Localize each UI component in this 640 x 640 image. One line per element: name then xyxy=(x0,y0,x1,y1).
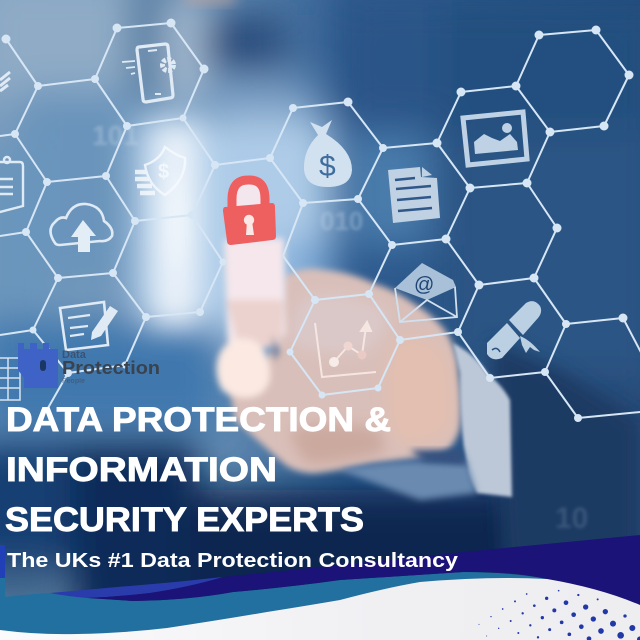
icon: smartphone with gear xyxy=(122,44,174,102)
logo: Data Protection People: Protection xyxy=(62,358,160,378)
halftone dots xyxy=(478,590,640,640)
title: INFORMATION xyxy=(6,451,277,489)
icon: money bag xyxy=(304,120,352,187)
sleeve xyxy=(490,340,640,580)
wave: teal swoosh xyxy=(0,572,640,640)
neck at top xyxy=(185,0,235,4)
icon: cloud upload xyxy=(50,204,112,252)
logo: Data Protection People xyxy=(18,343,160,388)
icon: shield with coins xyxy=(135,147,185,195)
title xyxy=(5,401,391,539)
icon: money bag: $ xyxy=(319,150,336,183)
icon: shield with coins: $ xyxy=(158,161,169,183)
wave: white foreground xyxy=(0,578,640,640)
icon: red padlock xyxy=(223,180,276,245)
subtitle: The UKs #1 Data Protection Consultancy xyxy=(7,549,459,572)
icon: left edge grid xyxy=(0,358,20,400)
faint binary digits: 10 xyxy=(555,502,588,535)
icon: left edge document xyxy=(0,72,10,91)
hexagon network lines xyxy=(0,23,640,418)
wave: royal blue swoosh xyxy=(50,577,223,598)
logo: Data Protection People: People xyxy=(62,378,85,385)
icon: clipboard xyxy=(0,157,23,213)
faint binary digits: 101 xyxy=(92,120,139,151)
logo castle mark xyxy=(18,343,58,388)
wave: left edge blue stripe xyxy=(0,545,5,579)
icon: diploma scroll xyxy=(487,301,541,359)
icon: picture frame xyxy=(463,112,527,165)
shirt cuff xyxy=(453,343,512,497)
icon: line chart xyxy=(315,322,376,377)
hand xyxy=(230,269,461,473)
logo: Data Protection People: Data xyxy=(62,349,87,361)
title: SECURITY EXPERTS xyxy=(5,501,364,539)
faint binary digits xyxy=(92,120,588,535)
wave: navy swoosh xyxy=(87,535,640,605)
hexagon network nodes xyxy=(2,18,634,422)
icon: email envelope: @ xyxy=(414,274,434,296)
faint binary digits: 010 xyxy=(320,206,363,236)
icon: document xyxy=(388,167,440,223)
icon: document with pencil xyxy=(60,302,118,350)
shirt glow xyxy=(152,125,200,325)
title: DATA PROTECTION & xyxy=(6,401,391,439)
icon: email envelope xyxy=(395,263,457,322)
